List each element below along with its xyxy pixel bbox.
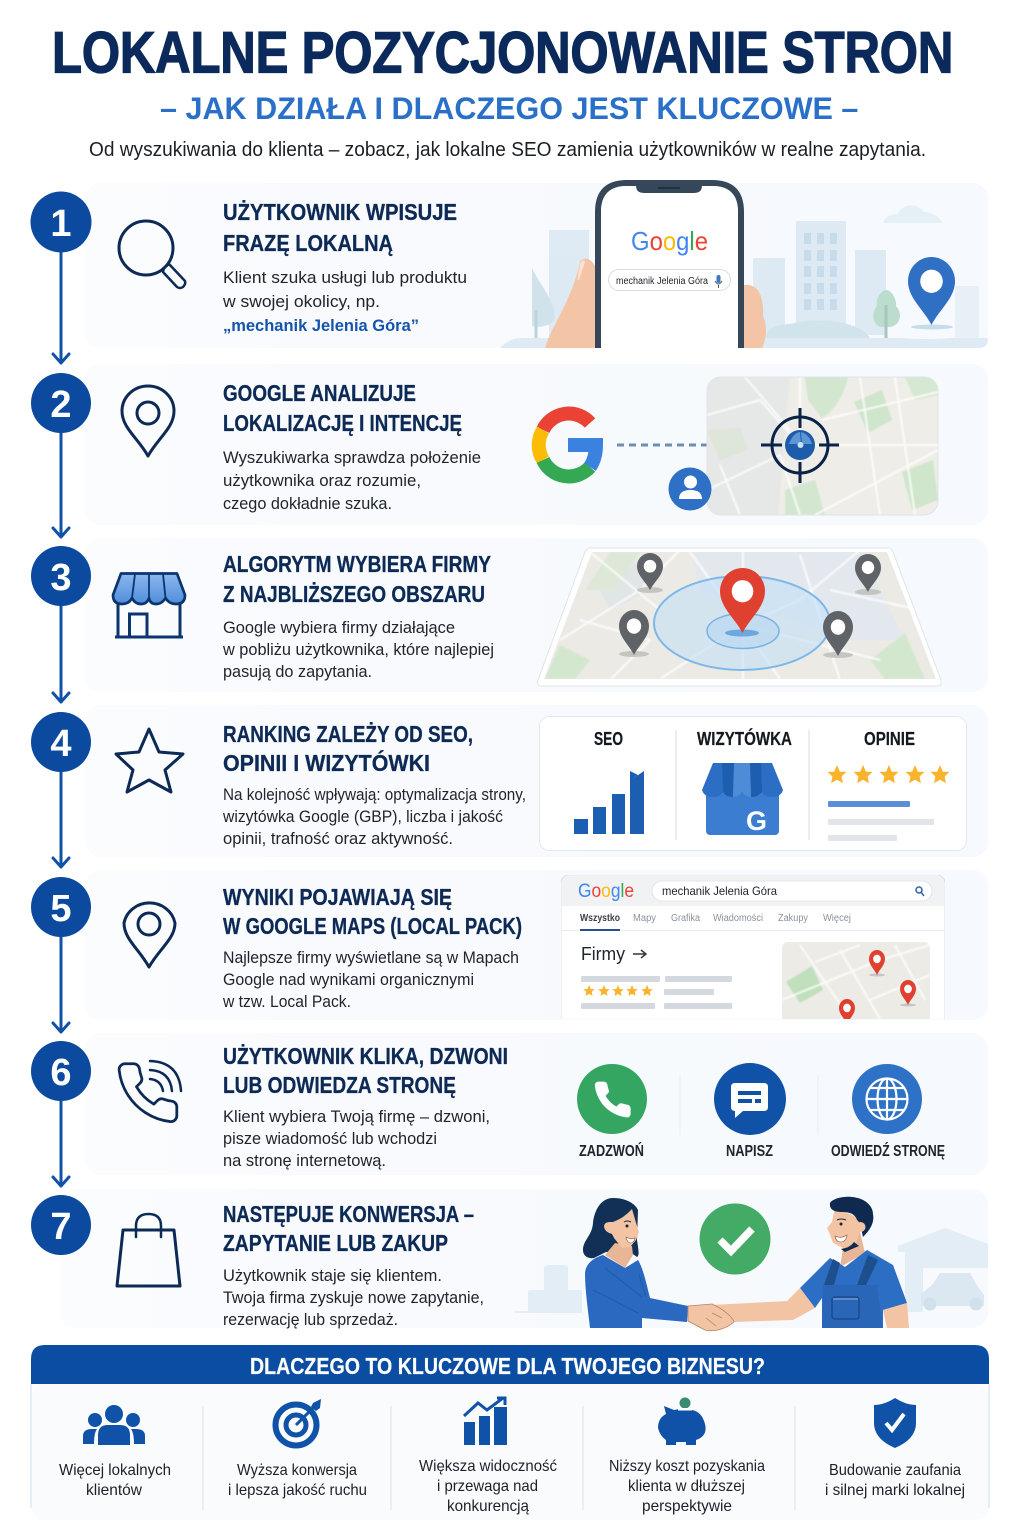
- heading step 3: Z NAJBLIŻSZEGO OBSZARU: [223, 581, 485, 607]
- red pin: [720, 568, 765, 633]
- description step 4: opinii, trafność oraz aktywność.: [223, 829, 453, 848]
- SEO column: SEO: [594, 729, 623, 749]
- timeline arrows: [53, 250, 69, 1186]
- benefit: higher conversion: [228, 1399, 367, 1499]
- heading step 2: LOKALIZACJĘ I INTENCJĘ: [223, 410, 462, 436]
- heading step 4: OPINII I WIZYTÓWKI: [223, 749, 430, 776]
- panel: step 2: [31, 364, 988, 525]
- description step 4: wizytówka Google (GBP), liczba i jakość: [222, 807, 503, 826]
- description step 5: w tzw. Local Pack.: [222, 992, 351, 1011]
- panel: why it matters: [31, 1345, 989, 1520]
- benefit: trust: Budowanie zaufania: [829, 1462, 961, 1479]
- heading step 1: [223, 199, 457, 256]
- number badge 5: 5: [50, 888, 72, 930]
- SEO column: [574, 729, 644, 834]
- map with search radius: [530, 545, 950, 686]
- benefit: more clients: [59, 1405, 171, 1499]
- description step 7: Użytkownik staje się klientem.: [223, 1266, 442, 1285]
- benefit: lower cost: [609, 1398, 765, 1515]
- benefit: visibility: [419, 1398, 557, 1515]
- banner heading: [31, 1345, 989, 1384]
- local results list: Firmy: [581, 944, 625, 964]
- number badge 6: [31, 1041, 91, 1101]
- intro text: Od wyszukiwania do klienta – zobacz, jak lokalne SEO zamienia użytkowników w realne zapytania.: [89, 139, 926, 161]
- search field: [652, 881, 932, 901]
- number badge 6: 6: [50, 1052, 72, 1094]
- description step 6: na stronę internetową.: [223, 1151, 386, 1170]
- description step 7: [223, 1266, 484, 1329]
- description step 3: Google wybiera firmy działające: [223, 618, 455, 637]
- benefit: lower cost: perspektywie: [642, 1498, 732, 1515]
- description step 1: [222, 268, 467, 335]
- title: LOKALNE POZYCJONOWANIE STRON: [52, 21, 953, 85]
- heading step 2: [223, 380, 462, 436]
- banner heading: DLACZEGO TO KLUCZOWE DLA TWOJEGO BIZNESU?: [250, 1353, 765, 1379]
- dashed connector: [617, 444, 750, 446]
- icon: location pin outline: [124, 903, 175, 967]
- heading step 7: [223, 1201, 474, 1256]
- heading step 5: WYNIKI POJAWIAJĄ SIĘ: [223, 884, 452, 910]
- heading step 4: RANKING ZALEŻY OD SEO,: [223, 721, 473, 747]
- message action: NAPISZ: [726, 1143, 773, 1160]
- map preview: [782, 942, 930, 1019]
- description step 2: czego dokładnie szuka.: [223, 494, 392, 513]
- website action: ODWIEDŹ STRONĘ: [831, 1141, 945, 1160]
- ranking factors card: [540, 716, 966, 850]
- search results browser: [561, 875, 945, 1035]
- Wizytówka column: G: [746, 806, 767, 836]
- call action: [577, 1064, 647, 1160]
- heading step 4: [223, 721, 473, 776]
- heading step 6: [223, 1043, 508, 1098]
- benefit: trust: [825, 1398, 965, 1499]
- description step 3: w pobliżu użytkownika, które najlepiej: [222, 640, 494, 659]
- Opinie column: OPINIE: [864, 729, 915, 749]
- search field: mechanik Jelenia Góra: [662, 884, 777, 898]
- description step 3: [222, 618, 494, 681]
- panel: step 5: [31, 870, 988, 1035]
- icon: Google G: [539, 414, 596, 476]
- panel: step 7: [31, 1189, 988, 1331]
- description step 7: rezerwację lub sprzedaż.: [223, 1310, 398, 1329]
- tabs: Mapy: [633, 913, 656, 924]
- tabs: Wiadomości: [713, 913, 763, 924]
- description step 2: użytkownika oraz rozumie,: [223, 471, 421, 490]
- description step 6: pisze wiadomość lub wchodzi: [223, 1129, 437, 1148]
- heading step 2: GOOGLE ANALIZUJE: [223, 380, 416, 406]
- search box: [608, 270, 730, 290]
- panel: step 3: [31, 538, 988, 692]
- map with target: [707, 377, 938, 515]
- Wizytówka column: WIZYTÓWKA: [697, 728, 792, 749]
- panel: step 6: [31, 1033, 988, 1175]
- tabs: Zakupy: [778, 913, 808, 924]
- search radius rings: [654, 576, 830, 670]
- number badge 2: 2: [50, 384, 72, 426]
- illustration: handshake: [515, 1197, 988, 1331]
- call action: ZADZWOŃ: [579, 1141, 644, 1160]
- Google logo: Google: [631, 226, 708, 256]
- Google logo small: Google: [578, 881, 634, 902]
- panel: step 1: [30, 180, 988, 348]
- number badge 4: [31, 712, 91, 772]
- description step 2: Wyszukiwarka sprawdza położenie: [223, 448, 481, 467]
- heading step 5: W GOOGLE MAPS (LOCAL PACK): [223, 913, 522, 939]
- woman: [583, 1198, 688, 1328]
- description step 4: [222, 785, 526, 848]
- benefit: visibility: i przewaga nad: [437, 1478, 538, 1495]
- number badge 4: 4: [50, 723, 72, 765]
- description step 5: Google nad wynikami organicznymi: [223, 970, 474, 989]
- description step 5: Najlepsze firmy wyświetlane są w Mapach: [223, 948, 519, 967]
- panel: step 4: [31, 705, 988, 857]
- search box: mechanik Jelenia Góra: [616, 276, 708, 287]
- description step 1: w swojej okolicy, np.: [222, 292, 380, 311]
- benefit: more clients: klientów: [86, 1482, 142, 1499]
- heading step 1: UŻYTKOWNIK WPISUJE: [223, 199, 457, 225]
- benefit: higher conversion: Wyższa konwersja: [237, 1462, 357, 1479]
- number badge 7: 7: [50, 1206, 72, 1248]
- heading step 6: UŻYTKOWNIK KLIKA, DZWONI: [223, 1043, 508, 1069]
- heading step 6: LUB ODWIEDZA STRONĘ: [223, 1072, 456, 1098]
- number badge 1: [30, 192, 92, 252]
- heading step 7: NASTĘPUJE KONWERSJA –: [223, 1201, 474, 1227]
- heading step 5: [223, 884, 522, 939]
- heading step 7: ZAPYTANIE LUB ZAKUP: [223, 1230, 448, 1256]
- number badge 7: [31, 1195, 91, 1255]
- icon: blue location pin: [908, 257, 955, 330]
- illustration: city and phone: [500, 180, 988, 348]
- tabs: [562, 913, 944, 931]
- benefit: higher conversion: i lepsza jakość ruchu: [228, 1482, 367, 1499]
- description step 1: Klient szuka usługi lub produktu: [223, 268, 467, 287]
- crosshair: [761, 408, 839, 483]
- icon: storefront: [113, 574, 185, 637]
- number badge 3: 3: [50, 557, 72, 599]
- icon: phone with signal: [119, 1061, 181, 1122]
- icon: location pin outline: [122, 386, 174, 456]
- local results list: [581, 944, 732, 1009]
- description step 1: „mechanik Jelenia Góra”: [223, 316, 419, 335]
- tabs: Grafika: [671, 913, 700, 924]
- man: [712, 1197, 909, 1328]
- benefit: more clients: Więcej lokalnych: [59, 1462, 171, 1479]
- number badge 5: [31, 877, 91, 937]
- check badge: [700, 1204, 770, 1274]
- Opinie column: [828, 729, 950, 841]
- subtitle: – JAK DZIAŁA I DLACZEGO JEST KLUCZOWE –: [160, 91, 858, 126]
- benefit: trust: i silnej marki lokalnej: [825, 1482, 965, 1499]
- website action: [831, 1064, 945, 1160]
- number badge 1: 1: [50, 203, 72, 245]
- icon: magnifier: [119, 221, 185, 288]
- icon: star outline: [116, 729, 183, 792]
- description step 4: Na kolejność wpływają: optymalizacja strony,: [223, 785, 526, 804]
- benefit: visibility: Większa widoczność: [419, 1458, 557, 1475]
- description step 7: Twoja firma zyskuje nowe zapytanie,: [223, 1288, 484, 1307]
- description step 6: Klient wybiera Twoją firmę – dzwoni,: [223, 1107, 490, 1126]
- number badge 2: [31, 373, 91, 433]
- message action: [714, 1063, 786, 1160]
- Wizytówka column: [697, 728, 792, 836]
- description step 2: [223, 448, 481, 513]
- icon: user avatar: [668, 468, 712, 510]
- heading step 3: ALGORYTM WYBIERA FIRMY: [223, 551, 491, 577]
- tabs: Więcej: [823, 913, 851, 924]
- number badge 3: [31, 546, 91, 606]
- description step 5: [222, 948, 519, 1011]
- tabs: Wszystko: [580, 913, 620, 924]
- heading step 3: [223, 551, 491, 607]
- grey pins: [619, 553, 881, 658]
- heading step 1: FRAZĘ LOKALNĄ: [223, 230, 393, 256]
- benefit: visibility: konkurencją: [447, 1498, 529, 1515]
- benefit: lower cost: klienta w dłuższej: [628, 1478, 745, 1495]
- description step 6: [223, 1107, 490, 1170]
- icon: shopping bag: [117, 1214, 180, 1286]
- clasped hands: [688, 1304, 734, 1331]
- description step 3: pasują do zapytania.: [223, 662, 372, 681]
- benefit: lower cost: Niższy koszt pozyskania: [609, 1458, 765, 1475]
